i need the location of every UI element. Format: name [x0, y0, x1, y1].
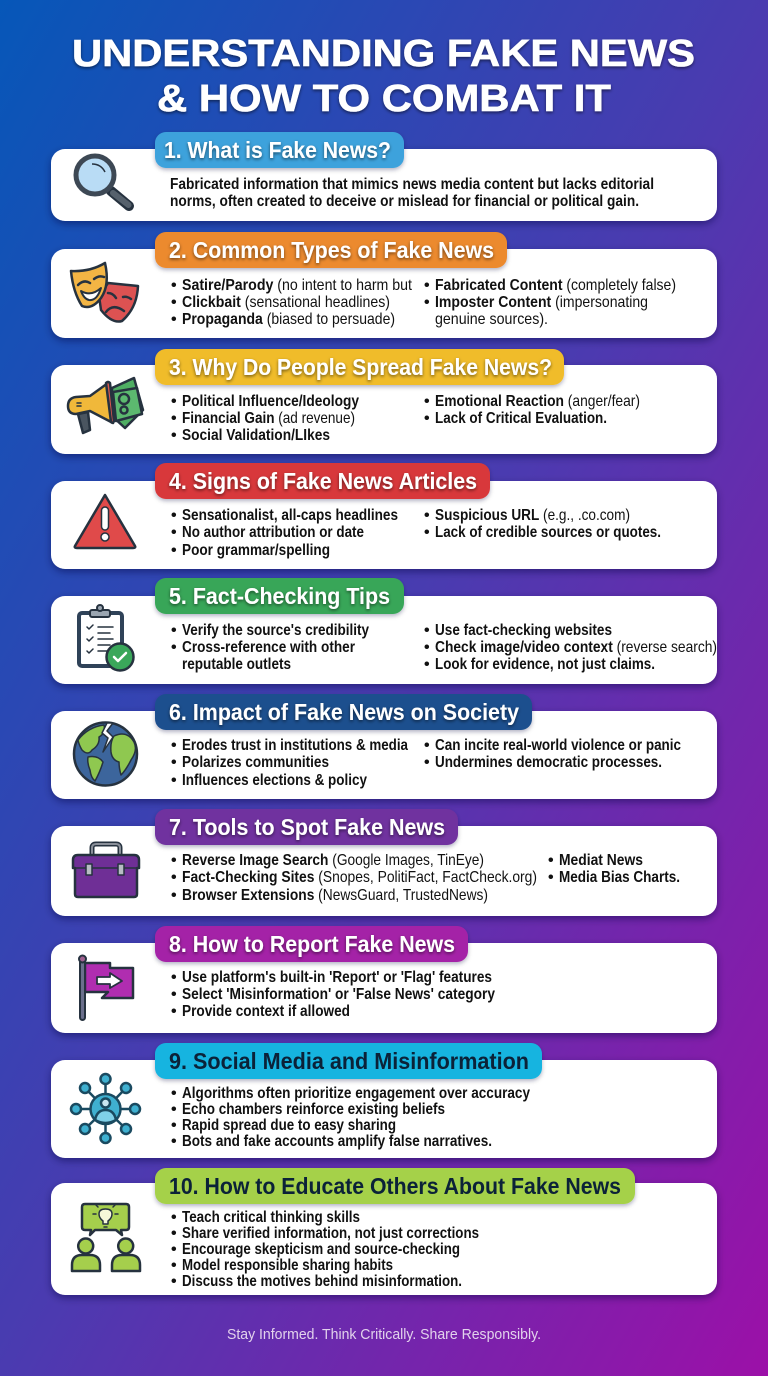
list: reasons right: Lack of Critical Evaluation.	[435, 410, 607, 427]
list: types left: Clickbait (sensational headlines)	[182, 294, 390, 311]
heading: 6: 6. Impact of Fake News on Society	[169, 699, 519, 725]
list: tips right: •	[424, 622, 430, 639]
list: tips right: Look for evidence, not just claims.	[435, 656, 655, 673]
icon: warning triangle	[75, 495, 135, 548]
list: tips right: Use fact-checking websites	[435, 622, 612, 639]
panel: 10. How to Educate	[51, 1168, 717, 1295]
heading: 4	[155, 463, 490, 499]
list: impact right: Can incite real-world violence or panic	[435, 737, 681, 754]
list: impact left: •	[171, 737, 177, 754]
panel: 9. Social Media	[51, 1043, 717, 1158]
list: education points: Encourage skepticism and source-checking	[182, 1241, 460, 1258]
heading: 1	[155, 132, 404, 168]
list: social media points: •	[171, 1117, 177, 1134]
panel: 8. How to Report	[51, 926, 717, 1033]
icon: theatre masks	[71, 263, 138, 322]
icon: cracked globe	[74, 722, 137, 786]
list: reasons left: •	[171, 427, 177, 444]
list: impact left	[171, 737, 408, 789]
icon: teaching people	[72, 1204, 140, 1271]
heading: 9	[155, 1043, 542, 1079]
list: tools right: Mediat News	[559, 852, 643, 869]
list: signs left: Sensationalist, all-caps headlines	[182, 507, 398, 524]
list: signs left	[171, 507, 398, 559]
heading: 8: 8. How to Report Fake News	[169, 931, 455, 957]
list: signs right: •	[424, 524, 430, 541]
list: tools left: •	[171, 852, 177, 869]
icon: toolbox	[73, 844, 139, 897]
list: education points: Share verified information, not just corrections	[182, 1225, 479, 1242]
list: tips right: •	[424, 656, 430, 673]
list: impact right	[424, 737, 681, 771]
panel: 6. Impact on Society	[51, 694, 717, 799]
icon: megaphone and money	[68, 378, 143, 433]
list: tools left: Reverse Image Search (Google Images, TinEye)	[182, 852, 484, 869]
list: social media points: Algorithms often prioritize engagement over accuracy	[182, 1085, 530, 1102]
list: tips left: Verify the source's credibility	[182, 622, 369, 639]
list: tools left	[171, 852, 537, 904]
list: types right: Imposter Content (impersonating	[435, 294, 648, 311]
heading: 10: 10. How to Educate Others About Fake News	[169, 1173, 621, 1199]
list: education points	[171, 1209, 479, 1290]
list: impact left: Erodes trust in institutions & media	[182, 737, 408, 754]
heading: 4: 4. Signs of Fake News Articles	[169, 468, 477, 494]
panel: 4. Signs of Fake News	[51, 463, 717, 569]
list: social media points: •	[171, 1085, 177, 1102]
panel: 3. Why Do People Spread	[51, 349, 717, 454]
footer tagline: Stay Informed. Think Critically. Share Responsibly.	[227, 1326, 541, 1343]
title: UNDERSTANDING FAKE NEWS	[72, 33, 695, 75]
list: tips left	[171, 622, 369, 673]
list: reasons left: Financial Gain (ad revenue)	[182, 410, 355, 427]
heading: 10	[155, 1168, 635, 1204]
list: social media points	[171, 1085, 530, 1150]
list: reasons right: Emotional Reaction (anger/fear)	[435, 393, 640, 410]
list: report steps: •	[171, 969, 177, 986]
panel: 7. Tools	[51, 809, 717, 916]
list: tips left: reputable outlets	[182, 656, 291, 673]
heading: 5: 5. Fact-Checking Tips	[169, 583, 390, 609]
text: definition: Fabricated information that mimics news media content but lacks editorial	[170, 176, 654, 193]
list: tools right	[548, 852, 680, 886]
list: signs right: Lack of credible sources or quotes.	[435, 524, 661, 541]
list: report steps: Select 'Misinformation' or 'False News' category	[182, 986, 495, 1003]
icon: magnifying glass	[76, 156, 129, 206]
list: tips right: Check image/video context (reverse search)	[435, 639, 717, 656]
list: report steps: •	[171, 1003, 177, 1020]
text: definition	[170, 176, 654, 210]
list: education points: Discuss the motives behind misinformation.	[182, 1273, 462, 1290]
list: impact right: •	[424, 737, 430, 754]
list: types right: Fabricated Content (completely false)	[435, 277, 676, 294]
list: education points: Teach critical thinking skills	[182, 1209, 360, 1226]
list: reasons left: Social Validation/LIkes	[182, 427, 330, 444]
list: education points: •	[171, 1209, 177, 1226]
heading: 7	[155, 809, 458, 845]
list: signs left: Poor grammar/spelling	[182, 542, 330, 559]
list: signs left: •	[171, 542, 177, 559]
list: education points: •	[171, 1257, 177, 1274]
heading: 3: 3. Why Do People Spread Fake News?	[169, 354, 552, 380]
list: types left: •	[171, 294, 177, 311]
list: social media points: •	[171, 1133, 177, 1150]
list: education points: •	[171, 1241, 177, 1258]
heading: 5	[155, 578, 404, 614]
list: signs right: •	[424, 507, 430, 524]
list: signs left: •	[171, 507, 177, 524]
list: signs left: •	[171, 524, 177, 541]
list: tips right: •	[424, 639, 430, 656]
list: reasons left: •	[171, 410, 177, 427]
icon: social network	[71, 1074, 140, 1143]
list: tools left: Fact-Checking Sites (Snopes, PolitiFact, FactCheck.org)	[182, 869, 537, 886]
panel: 2. Common Types	[51, 232, 717, 338]
list: social media points: Rapid spread due to easy sharing	[182, 1117, 396, 1134]
list: education points: Model responsible sharing habits	[182, 1257, 393, 1274]
list: signs right: Suspicious URL (e.g., .co.com)	[435, 507, 630, 524]
list: reasons left: •	[171, 393, 177, 410]
list: tools right: •	[548, 852, 554, 869]
heading: 2	[155, 232, 507, 268]
list: tools right: Media Bias Charts.	[559, 869, 680, 886]
list: social media points: •	[171, 1101, 177, 1118]
heading: 8	[155, 926, 468, 962]
list: types right: genuine sources).	[435, 311, 548, 328]
list: types left: Satire/Parody (no intent to harm but	[182, 277, 412, 294]
list: types left: •	[171, 311, 177, 328]
panel: 1. What is Fake News	[51, 132, 717, 221]
list: tools right: •	[548, 869, 554, 886]
list: signs left: No author attribution or date	[182, 524, 364, 541]
list: types right	[424, 277, 676, 328]
list: report steps	[171, 969, 495, 1020]
heading: 7: 7. Tools to Spot Fake News	[169, 814, 445, 840]
list: education points: •	[171, 1273, 177, 1290]
list: education points: •	[171, 1225, 177, 1242]
heading: 2: 2. Common Types of Fake News	[169, 237, 494, 263]
list: tips right	[424, 622, 717, 673]
list: reasons right: •	[424, 393, 430, 410]
list: tools left: •	[171, 869, 177, 886]
list: types left: Propaganda (biased to persuade)	[182, 311, 395, 328]
heading: 1: 1. What is Fake News?	[164, 137, 391, 163]
list: reasons right: •	[424, 410, 430, 427]
list: tips left: •	[171, 622, 177, 639]
title: & HOW TO COMBAT IT	[157, 78, 611, 120]
list: types left	[171, 277, 412, 328]
list: types right: •	[424, 277, 430, 294]
list: types right: •	[424, 294, 430, 311]
list: types left: •	[171, 277, 177, 294]
list: report steps: Provide context if allowed	[182, 1003, 350, 1020]
list: impact left: •	[171, 772, 177, 789]
list: tips left: Cross-reference with other	[182, 639, 355, 656]
heading: 9: 9. Social Media and Misinformation	[169, 1048, 529, 1074]
text: definition: norms, often created to deceive or mislead for financial or political gain.	[170, 193, 639, 210]
list: social media points: Bots and fake accounts amplify false narratives.	[182, 1133, 492, 1150]
list: impact right: •	[424, 754, 430, 771]
list: social media points: Echo chambers reinforce existing beliefs	[182, 1101, 445, 1118]
list: impact left: Polarizes communities	[182, 754, 329, 771]
list: tips left: •	[171, 639, 177, 656]
title	[72, 33, 695, 120]
icon: report flag	[79, 956, 133, 1020]
heading: 3	[155, 349, 564, 385]
list: report steps: •	[171, 986, 177, 1003]
list: impact left: Influences elections & policy	[182, 772, 367, 789]
list: impact right: Undermines democratic processes.	[435, 754, 662, 771]
list: reasons left	[171, 393, 359, 444]
heading: 6	[155, 694, 532, 730]
icon: clipboard with check	[79, 605, 134, 670]
list: signs right	[424, 507, 661, 541]
list: impact left: •	[171, 754, 177, 771]
list: tools left: •	[171, 887, 177, 904]
panel: 5. Fact-Checking Tips	[51, 578, 717, 684]
list: tools left: Browser Extensions (NewsGuard, TrustedNews)	[182, 887, 488, 904]
list: reasons left: Political Influence/Ideology	[182, 393, 359, 410]
list: reasons right	[424, 393, 640, 427]
list: report steps: Use platform's built-in 'Report' or 'Flag' features	[182, 969, 492, 986]
